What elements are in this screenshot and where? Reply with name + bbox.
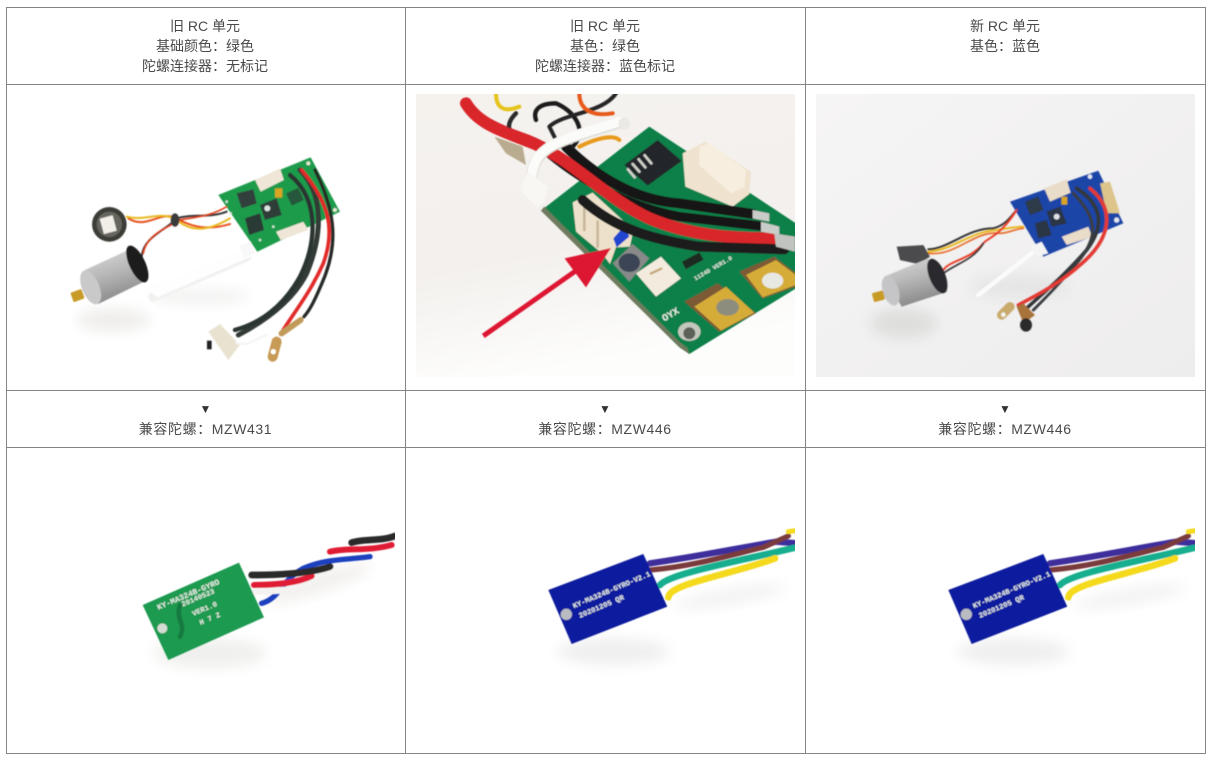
header: column 3 text: 新 RC 单元 <box>970 18 1040 34</box>
header: column 2 text: 陀螺连接器：蓝色标记 <box>535 58 675 74</box>
compatibility label: column 1 <box>139 402 272 437</box>
header: column 1 text: 基础颜色：绿色 <box>156 38 254 54</box>
header: column 1 text: 旧 RC 单元 <box>170 18 240 34</box>
photo: green gyro MZW431: 20140523 <box>181 588 217 609</box>
photo: blue gyro MZW446, column 3: 20201205 QR <box>978 594 1026 621</box>
photo: blue gyro MZW446, column 3: KY-MA324B-GYRO-V2.1 <box>972 571 1053 611</box>
compatibility label: column 2 <box>538 402 672 437</box>
photo: blue gyro MZW446, column 3 <box>948 531 1197 665</box>
photo: old green RC unit with blue marker and red arrow <box>416 93 796 377</box>
arrow: red pointer to blue marker <box>483 248 611 336</box>
header: column 2 text: 旧 RC 单元 <box>570 18 640 34</box>
header: column 1 text <box>142 18 268 74</box>
compatibility label: column 3: 兼容陀螺：MZW446 <box>938 421 1072 437</box>
photo: green gyro MZW431 <box>143 536 395 668</box>
compatibility label: column 1: 兼容陀螺：MZW431 <box>139 421 272 437</box>
compatibility label: column 3 <box>938 402 1072 437</box>
photo: green gyro MZW431: H 7 Z <box>199 612 223 628</box>
header: column 3 text: 基色：蓝色 <box>970 38 1040 54</box>
compatibility label: column 3: ▼ <box>999 402 1011 416</box>
header: column 2 text <box>535 18 675 74</box>
photo: old green RC unit with blue marker and red arrow: OYX <box>660 306 681 324</box>
photo: old green RC unit without marker <box>70 157 340 360</box>
compatibility label: column 2: ▼ <box>599 402 611 416</box>
photo: blue gyro MZW446, column 2: KY-MA324B-GYRO-V2.1 <box>572 571 653 611</box>
photo: new blue RC unit <box>816 94 1195 377</box>
header: column 3 text <box>970 18 1040 54</box>
photo: old green RC unit with blue marker and red arrow: 1124D VER1.0 <box>693 255 734 282</box>
photo: blue gyro MZW446, column 2 <box>548 531 797 665</box>
photo: green gyro MZW431: VER1.0 <box>191 601 219 619</box>
header: column 2 text: 基色：绿色 <box>570 38 640 54</box>
compatibility label: column 2: 兼容陀螺：MZW446 <box>538 421 672 437</box>
compatibility label: column 1: ▼ <box>200 402 211 416</box>
photo: blue gyro MZW446, column 2: 20201205 QR <box>578 594 626 621</box>
photo: green gyro MZW431: KY-MA324B-GYRO <box>156 578 221 613</box>
header: column 1 text: 陀螺连接器：无标记 <box>142 58 268 74</box>
